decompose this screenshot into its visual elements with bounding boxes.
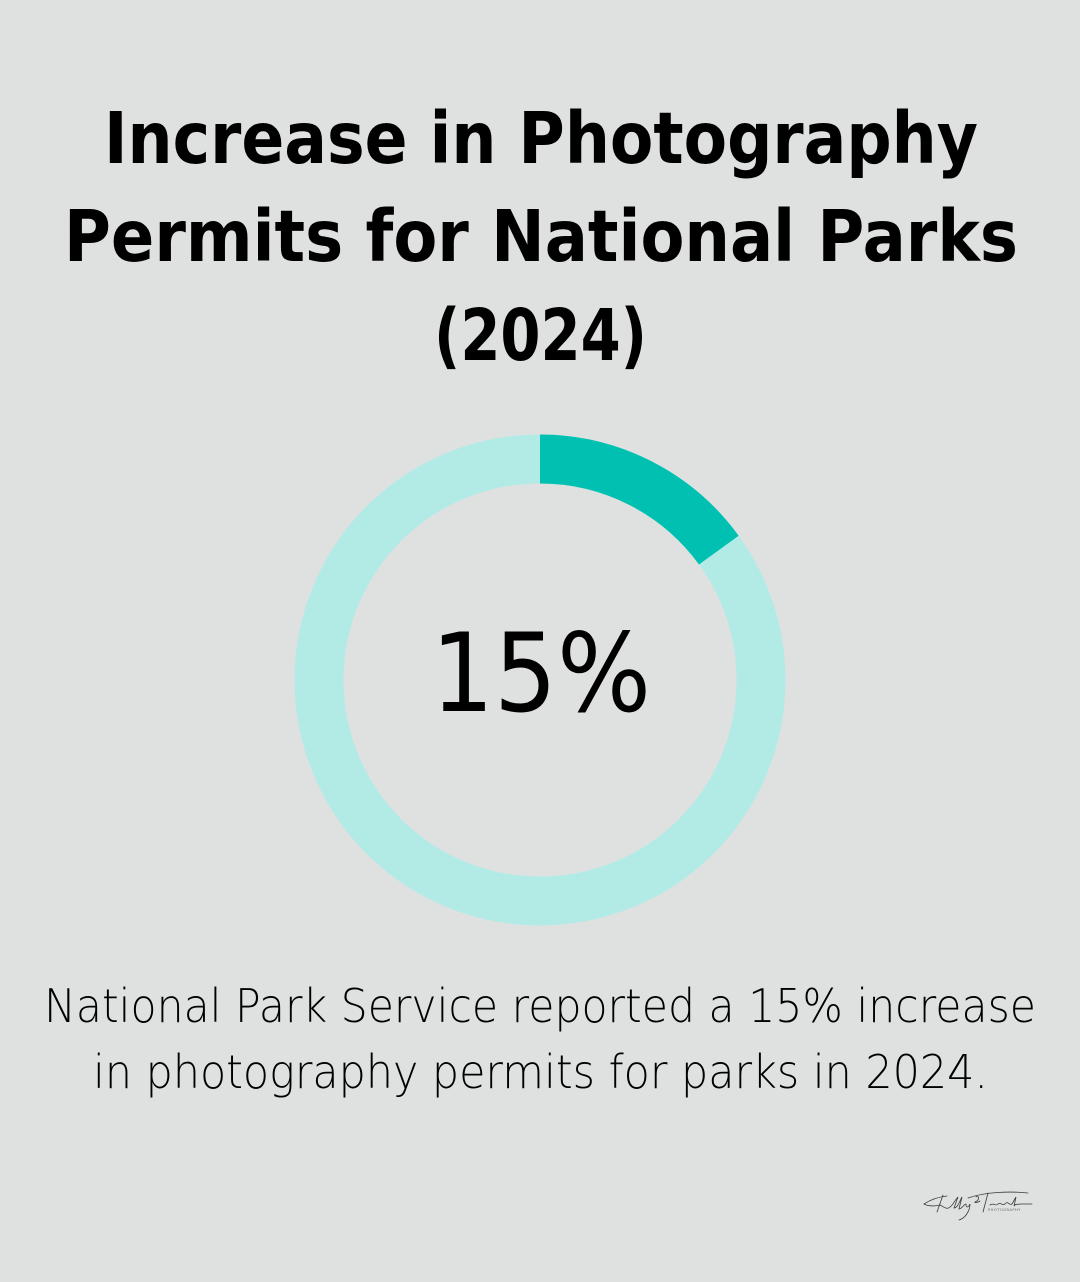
title: (2024) xyxy=(434,294,647,377)
title: Increase in Photography xyxy=(104,97,978,180)
donut chart: 15% xyxy=(319,459,761,901)
description: in photography permits for parks in 2024. xyxy=(93,1045,988,1099)
title xyxy=(64,97,1018,377)
logo: signature: PHOTOGRAPHY xyxy=(988,1208,1021,1212)
logo: signature xyxy=(924,1192,1032,1220)
description xyxy=(44,979,1036,1099)
center value: 15% xyxy=(431,610,651,737)
